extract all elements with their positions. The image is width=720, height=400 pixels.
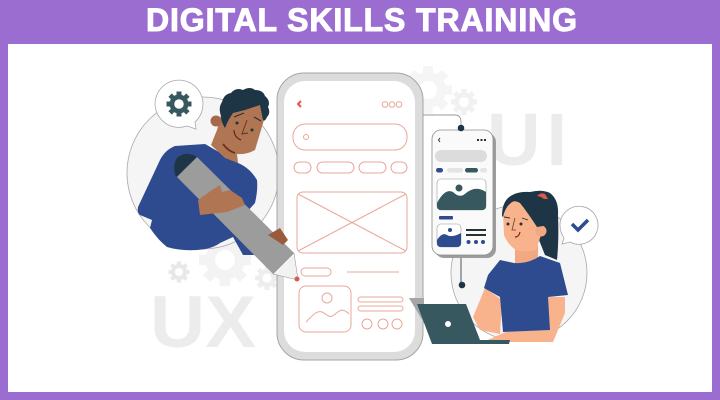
pencil tip bbox=[273, 253, 298, 280]
face bbox=[503, 200, 544, 252]
background gears lower bbox=[168, 234, 279, 290]
connector lines bbox=[423, 115, 461, 285]
woman bbox=[473, 191, 568, 342]
large phone wireframe bbox=[277, 73, 423, 360]
title: DIGITAL SKILLS TRAINING bbox=[146, 2, 577, 38]
face details bbox=[223, 113, 261, 153]
man bbox=[138, 88, 300, 282]
ponytail and back hair bbox=[530, 191, 558, 260]
small phone bbox=[432, 130, 496, 258]
label: UI: UI bbox=[487, 98, 567, 181]
label: UX: UX bbox=[150, 282, 256, 363]
pencil bbox=[177, 157, 294, 274]
right arm bbox=[483, 297, 565, 342]
ear bbox=[210, 116, 222, 126]
shirt bbox=[484, 256, 568, 332]
pencil cap bbox=[174, 154, 197, 177]
speech bubble: check bbox=[560, 206, 598, 244]
left arm bbox=[473, 288, 502, 334]
neck and face bbox=[211, 103, 264, 163]
shirt bbox=[138, 144, 260, 255]
laptop bbox=[417, 304, 510, 344]
hair bbox=[220, 88, 269, 128]
man background circle bbox=[127, 97, 279, 249]
background gears upper bbox=[404, 66, 477, 115]
lower hand bbox=[268, 228, 288, 245]
laptop shadow bbox=[409, 298, 427, 328]
front hair bbox=[502, 192, 550, 227]
hair tie bbox=[537, 193, 548, 199]
connector dots bbox=[458, 125, 465, 288]
upper hand bbox=[198, 185, 245, 215]
ear bbox=[536, 226, 546, 236]
neck bbox=[515, 245, 538, 265]
pencil point bbox=[294, 276, 300, 282]
speech bubble: gear bbox=[155, 80, 203, 129]
face details bbox=[504, 217, 528, 237]
woman background circle bbox=[451, 205, 587, 341]
